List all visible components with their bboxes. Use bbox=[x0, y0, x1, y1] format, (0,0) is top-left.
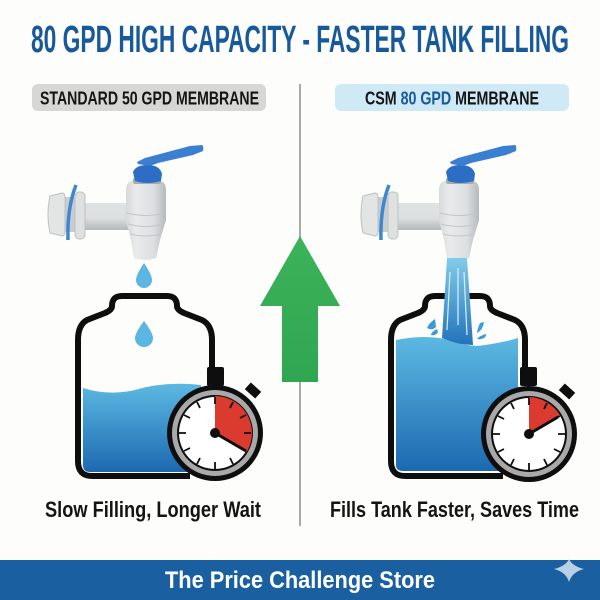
faucet flange bbox=[75, 192, 85, 239]
green up arrow bbox=[260, 236, 340, 382]
faucet body bbox=[439, 178, 479, 260]
stopwatch hub bbox=[524, 429, 534, 439]
faucet cap bbox=[133, 165, 162, 183]
left tank drop bbox=[135, 321, 153, 347]
stopwatch case bbox=[481, 386, 577, 482]
right badge: CSM membrane bbox=[335, 84, 569, 111]
left tank bbox=[78, 296, 212, 476]
right tank water bbox=[396, 337, 518, 471]
faucet pipe bbox=[82, 203, 130, 230]
faucet metal collar bbox=[446, 178, 474, 184]
faucet neck bbox=[60, 197, 78, 232]
right stopwatch: short fill time bbox=[481, 367, 577, 482]
faucet nut bbox=[361, 193, 378, 236]
stopwatch ticks bbox=[179, 397, 251, 469]
right tank outline bbox=[391, 296, 525, 476]
faucet pipe bbox=[395, 203, 443, 230]
stopwatch crown bbox=[207, 367, 224, 386]
left stopwatch: long fill time bbox=[167, 367, 263, 481]
stopwatch red elapsed wedge bbox=[215, 396, 252, 452]
footer store name: The Price Challenge Store bbox=[165, 567, 435, 594]
faucet cap bbox=[446, 165, 475, 183]
left tank water bbox=[83, 384, 201, 472]
right tank bbox=[391, 258, 525, 476]
footer band bbox=[0, 559, 600, 600]
stopwatch hub bbox=[210, 428, 220, 438]
sparkle icon bbox=[554, 559, 584, 582]
faucet body ribs bbox=[440, 213, 478, 236]
stopwatch crown bbox=[520, 367, 537, 386]
left badge: standard membrane bbox=[32, 84, 266, 111]
center divider bbox=[299, 84, 301, 526]
faucet nut bbox=[48, 193, 65, 236]
splash droplets bbox=[427, 319, 486, 339]
stopwatch hand bbox=[529, 417, 558, 434]
right faucet bbox=[361, 145, 516, 260]
stopwatch red elapsed wedge bbox=[529, 397, 560, 434]
faucet metal collar bbox=[133, 178, 161, 184]
faucet neck bbox=[373, 197, 391, 232]
stopwatch side button bbox=[245, 382, 261, 399]
left tank outline bbox=[78, 296, 212, 476]
stopwatch ticks bbox=[493, 398, 565, 470]
faucet body bbox=[126, 178, 166, 260]
water stream bbox=[442, 258, 473, 345]
stopwatch hand bbox=[215, 433, 246, 451]
stopwatch side button bbox=[559, 383, 575, 400]
left badge: standard membrane: STANDARD 50 GPD MEMBRANE bbox=[40, 88, 259, 108]
faucet lever bbox=[450, 145, 516, 166]
faucet seal ring bbox=[381, 185, 389, 240]
faucet seal ring bbox=[68, 185, 76, 240]
stopwatch case bbox=[167, 385, 263, 481]
right badge: CSM membrane: CSM 80 GPD MEMBRANE bbox=[365, 88, 539, 108]
faucet lever bbox=[137, 145, 203, 166]
faucet flange bbox=[388, 192, 398, 239]
faucet body ribs bbox=[127, 213, 165, 236]
left falling drop bbox=[136, 263, 152, 288]
left caption: Slow Filling, Longer Wait bbox=[45, 497, 262, 522]
left faucet bbox=[48, 145, 203, 260]
